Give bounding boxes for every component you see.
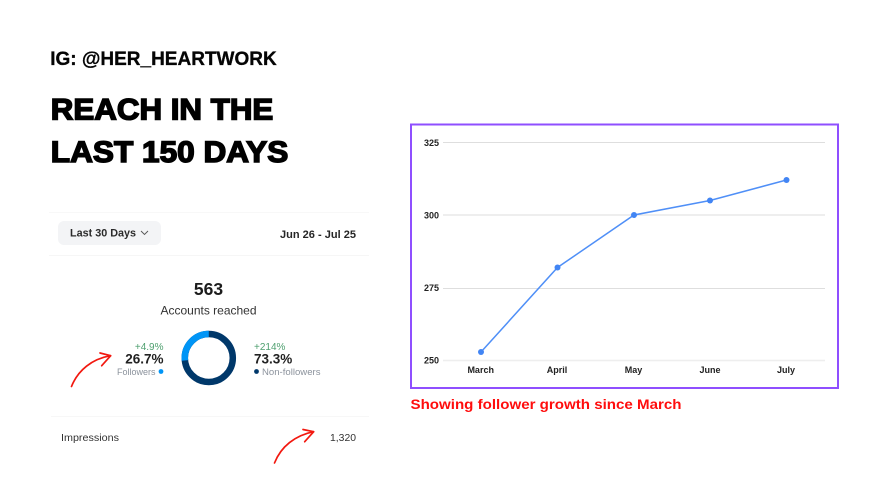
y axis labels bbox=[424, 138, 439, 366]
x axis labels: June bbox=[699, 365, 721, 375]
data points bbox=[478, 177, 790, 355]
arrow: impressions bbox=[274, 430, 314, 463]
x axis labels: July bbox=[777, 365, 795, 375]
date range: Jun 26 - Jul 25 bbox=[280, 229, 356, 241]
y axis labels: 325 bbox=[424, 138, 439, 148]
x axis labels: May bbox=[625, 365, 642, 375]
followers stat: +4.9% bbox=[135, 342, 164, 353]
date range dropdown bbox=[58, 221, 161, 245]
account handle: IG: @HER_HEARTWORK bbox=[50, 48, 277, 70]
title: REACH IN THE bbox=[51, 93, 273, 126]
accounts reached total: 563 bbox=[194, 279, 223, 299]
title bbox=[51, 93, 288, 169]
impressions row: 1,320 bbox=[330, 432, 356, 444]
x axis labels: April bbox=[547, 365, 567, 375]
followers stat: Followers bbox=[117, 367, 156, 377]
followers stat bbox=[117, 342, 164, 377]
data line bbox=[481, 180, 786, 352]
panel: follower growth chart frame bbox=[411, 124, 838, 388]
impressions row: Impressions bbox=[61, 432, 119, 444]
panel: reach insights screenshot bbox=[49, 212, 369, 444]
y axis labels: 275 bbox=[424, 283, 439, 293]
x axis labels: March bbox=[467, 365, 494, 375]
accounts reached total bbox=[160, 279, 257, 318]
donut chart bbox=[185, 334, 233, 382]
impressions row bbox=[61, 432, 356, 444]
line chart bbox=[424, 138, 825, 375]
y axis labels: 300 bbox=[424, 210, 439, 220]
non-followers stat: 73.3% bbox=[254, 352, 292, 366]
non-followers stat: Non-followers bbox=[262, 367, 321, 377]
accounts reached total: Accounts reached bbox=[160, 304, 257, 318]
caption: Showing follower growth since March bbox=[410, 396, 682, 412]
title: LAST 150 DAYS bbox=[51, 136, 288, 169]
followers stat: 26.7% bbox=[125, 352, 164, 366]
non-followers stat: +214% bbox=[254, 342, 286, 353]
non-followers stat bbox=[254, 342, 321, 377]
x axis labels bbox=[467, 365, 795, 375]
y axis labels: 250 bbox=[424, 356, 439, 366]
date range dropdown: Last 30 Days bbox=[70, 228, 136, 240]
arrow: followers bbox=[72, 353, 111, 386]
